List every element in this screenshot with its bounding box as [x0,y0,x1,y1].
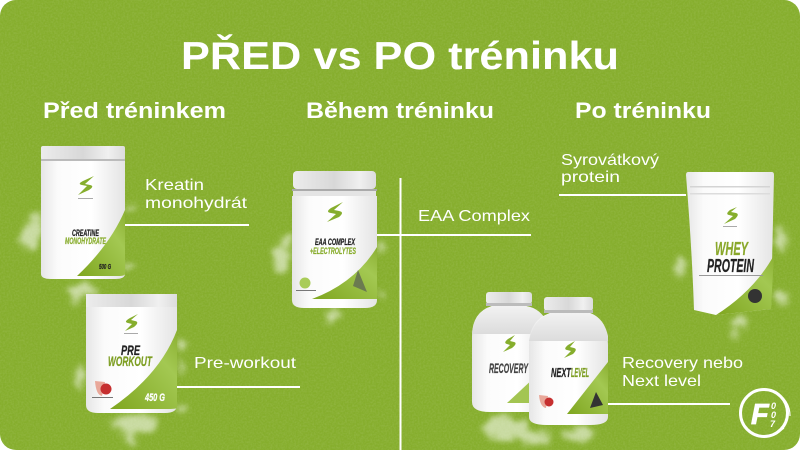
label: Syrovátkový protein: Syrovátkový [561,152,659,169]
product: Next Level jar: LEVEL [571,366,589,380]
label: Pre-workout [177,355,300,388]
label: Recovery nebo Next level: Next level [622,373,701,390]
product: EAA Complex jar [292,171,377,308]
logo: F007: 0 [771,401,776,411]
label: Recovery nebo Next level: Recovery nebo [622,355,743,372]
logo: F007 [740,390,790,436]
product: Whey Protein pouch: WHEY [715,239,749,259]
product: Next Level jar [529,297,608,425]
product: Pre Workout jar: 450 G [144,392,165,404]
label: Syrovátkový protein [559,152,686,196]
label: EAA Complex: EAA Complex [418,208,530,225]
heading: after training: Po tréninku [575,98,711,123]
product: Creatine Monohydrate jar: MONOHYDRATE [65,236,106,247]
label: Kreatin monohydrát: monohydrát [145,195,248,212]
title: PŘED vs PO tréninku [181,34,619,78]
product: Creatine Monohydrate jar [41,146,125,279]
label: Recovery nebo Next level [608,355,743,405]
product: Recovery jar: RECOVERY [489,360,529,376]
label: Pre-workout: Pre-workout [194,355,297,372]
product: Creatine Monohydrate jar: 500 G [99,262,111,271]
product: Whey Protein pouch [686,172,774,315]
product: Pre Workout jar: WORKOUT [108,353,153,369]
product: Creatine Monohydrate jar: CREATINE [72,228,99,239]
label: Kreatin monohydrát: Kreatin [145,177,204,194]
product: Pre Workout jar: PRE [121,342,140,358]
product: EAA Complex jar: EAA COMPLEX [315,237,356,247]
heading: during training: Během tréninku [306,98,494,123]
product: EAA Complex jar: +ELECTROLYTES [310,246,356,256]
divider: vertical line [400,178,402,450]
logo: F007: 0 [771,410,776,420]
heading: before training: Před tréninkem [43,98,226,123]
logo: F007: 7 [770,419,776,429]
label: Syrovátkový protein: protein [561,169,620,186]
label: Kreatin monohydrát [125,177,249,226]
powder splashes [21,203,788,447]
product: Pre Workout jar [86,294,177,413]
product: Whey Protein pouch: PROTEIN [707,256,755,276]
product: Next Level jar: NEXT [551,366,572,380]
logo: F007: F [751,399,770,431]
product: Recovery jar [472,292,548,412]
